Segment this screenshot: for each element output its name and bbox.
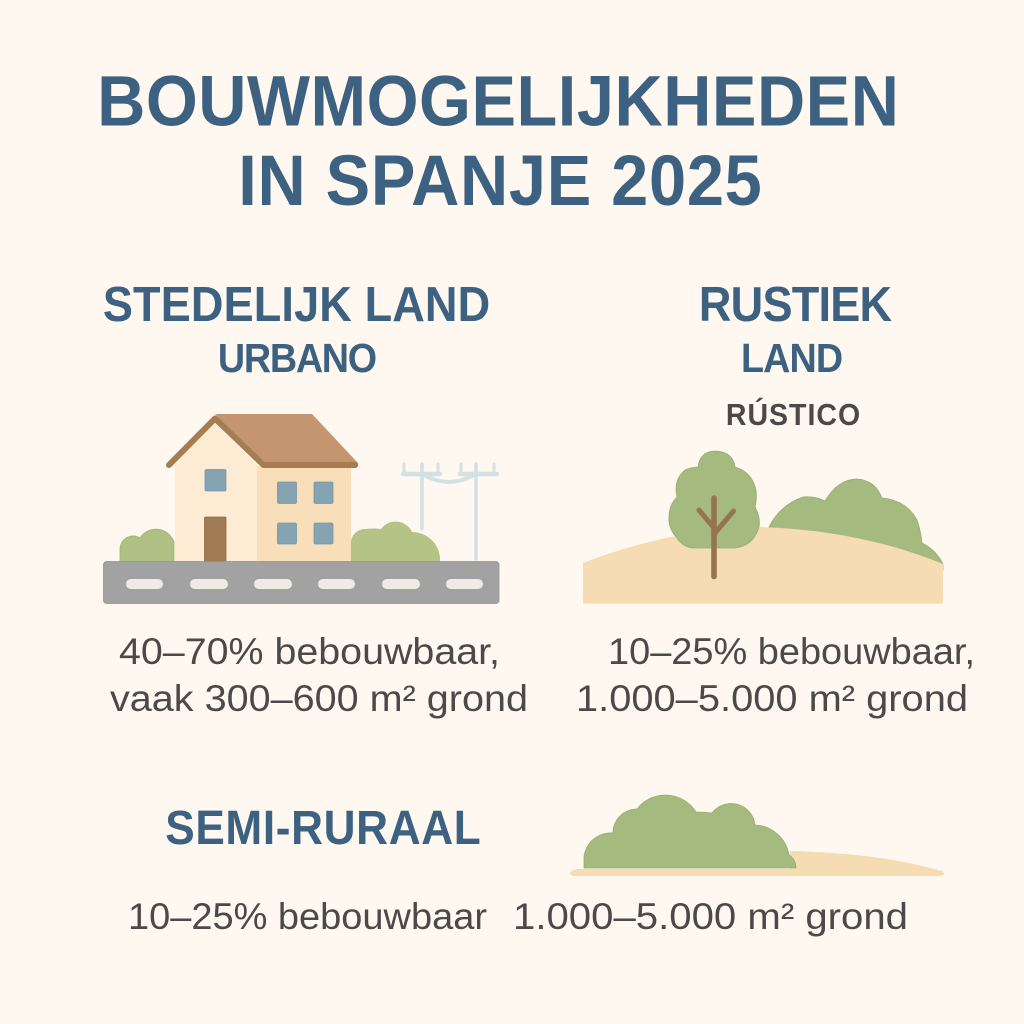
- icon: tree: [669, 451, 759, 576]
- illustration: house with road: [104, 414, 499, 604]
- heading: rustiek land: LAND: [741, 336, 843, 381]
- title: IN SPANJE 2025: [238, 141, 762, 220]
- text: rural details: [576, 631, 975, 719]
- icon: house: [169, 414, 358, 563]
- icon: road: [104, 562, 499, 604]
- heading: stedelijk land: STEDELIJK LAND: [103, 276, 490, 331]
- text: urban details: vaak 300–600 m² grond: [110, 678, 528, 719]
- illustration: semi-rural bush: [570, 795, 944, 876]
- icon: bush: [584, 795, 796, 868]
- icon: ground: [570, 851, 944, 876]
- heading: stedelijk land: URBANO: [218, 336, 377, 381]
- icon: hill: [583, 527, 943, 604]
- text: semi-rural details: [128, 896, 908, 937]
- text: semi-rural details: 1.000–5.000 m² grond: [513, 896, 908, 937]
- title: [97, 62, 899, 220]
- text: urban details: [110, 631, 528, 719]
- heading: semi-ruraal: SEMI-RURAAL: [165, 800, 481, 854]
- heading: stedelijk land: [103, 276, 490, 381]
- illustration: rural hill with tree: [583, 451, 943, 604]
- text: urban details: 40–70% bebouwbaar,: [119, 631, 500, 672]
- icon: left bush: [120, 529, 174, 562]
- text: semi-rural details: 10–25% bebouwbaar: [128, 896, 487, 937]
- heading: rustiek land: RUSTIEK: [699, 276, 892, 331]
- heading: rustiek land: RÚSTICO: [726, 397, 860, 432]
- icon: utility poles: [403, 464, 497, 559]
- icon: right bush: [769, 479, 943, 570]
- title: BOUWMOGELIJKHEDEN: [97, 62, 899, 141]
- icon: right bush: [351, 521, 440, 562]
- heading: rustiek land: [699, 276, 892, 432]
- text: rural details: 1.000–5.000 m² grond: [576, 678, 968, 719]
- text: rural details: 10–25% bebouwbaar,: [608, 631, 975, 672]
